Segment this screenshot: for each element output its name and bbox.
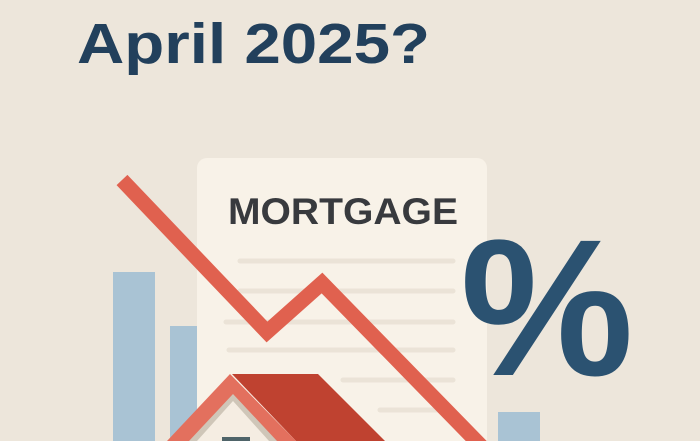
icon: percent sign: % <box>460 199 634 417</box>
title: April 2025? <box>77 12 430 76</box>
arrow: falling red line <box>122 180 485 441</box>
icon: house <box>167 374 385 441</box>
panel: mortgage document <box>197 158 487 441</box>
heading: mortgage: MORTGAGE <box>228 191 458 232</box>
bar chart <box>113 272 540 441</box>
